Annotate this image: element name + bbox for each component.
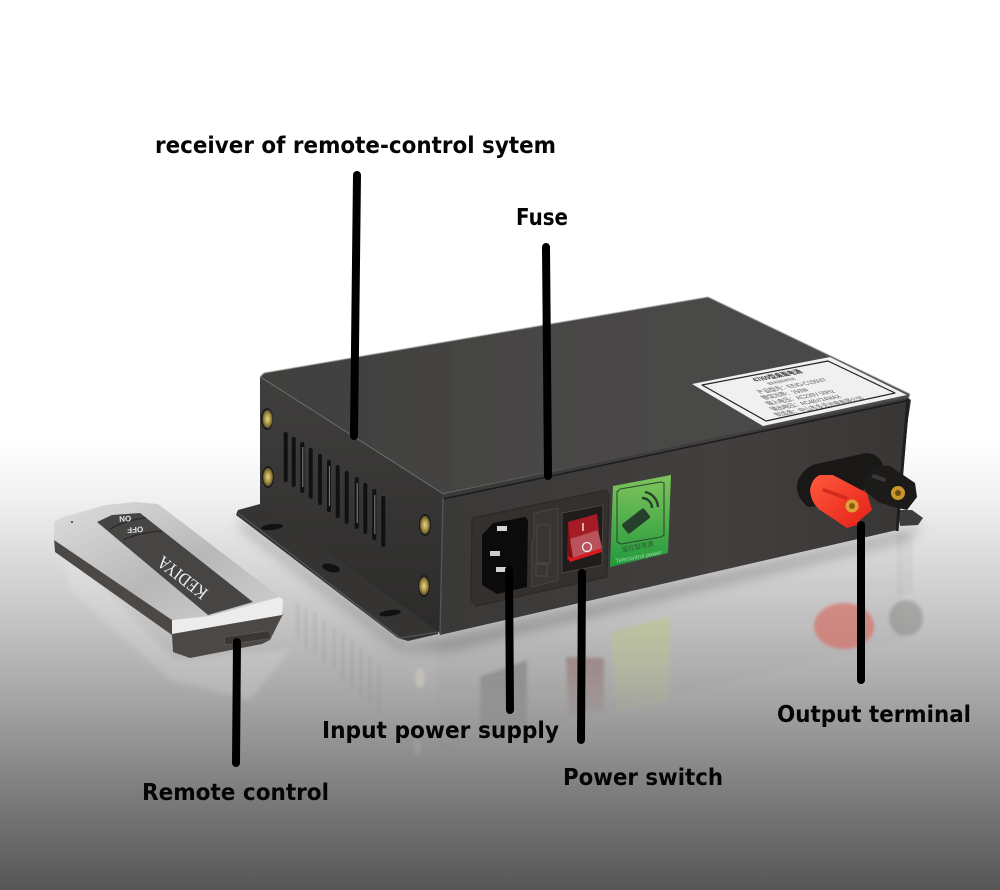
on label: ON (119, 514, 131, 523)
spec label: 输入电压：AC220V 50Hz (762, 388, 838, 406)
label: remote control: Remote control (142, 780, 329, 806)
spec label: 制造商：中山市多天光电有限公司 (771, 395, 868, 418)
side face (260, 377, 443, 633)
remote body underside (54, 538, 283, 658)
power inlet (482, 517, 528, 594)
spec label: 输出电压：AC48V/24MAX (767, 393, 845, 412)
spec label: 遥控电源系统专用 (764, 377, 798, 386)
label: input power supply: Input power supply (322, 718, 559, 744)
power switch (562, 505, 603, 573)
power socket plate (471, 490, 609, 606)
remote control (54, 502, 283, 658)
leader line: fuse (546, 247, 548, 476)
label: power switch: Power switch (563, 765, 723, 791)
red terminal cap (810, 475, 872, 528)
output terminals (797, 453, 917, 528)
remote front edge (172, 597, 283, 634)
front face (440, 398, 911, 635)
top face (260, 297, 910, 494)
leader line: remote control (236, 642, 237, 763)
leader line: input power (509, 570, 510, 710)
mounting flange right (898, 510, 923, 526)
screws (261, 408, 431, 597)
terminal base (797, 453, 884, 507)
label: receiver: receiver of remote-control sytem (155, 133, 556, 159)
green telecontrol badge (610, 475, 671, 567)
vent slots (286, 434, 383, 545)
leader line: power switch (581, 573, 582, 740)
label: output terminal: Output terminal (777, 702, 971, 728)
green telecontrol badge: Telecontrol power (615, 550, 663, 565)
floor reflections (62, 535, 923, 756)
spec label (692, 357, 907, 426)
remote silver top (54, 502, 280, 620)
black terminal cap (863, 465, 917, 510)
label: fuse: Fuse (516, 205, 568, 231)
remote button strip (97, 513, 253, 615)
green telecontrol badge: 遥控型电源 (621, 539, 655, 554)
fuse holder (532, 508, 558, 587)
spec label: 产品型号：EEIO-C150/47 (754, 377, 830, 395)
spec label: 额定功率：150W (758, 387, 812, 401)
leader line: output terminal (857, 525, 865, 680)
leader line: receiver (354, 175, 357, 436)
receiver box (236, 297, 925, 650)
shadow under box (240, 518, 925, 650)
mounting flange left (236, 504, 440, 641)
spec label: 47/60型桌面电源 (748, 368, 806, 383)
off label: OFF (127, 524, 143, 535)
brand text: KEDIYA (153, 552, 211, 603)
